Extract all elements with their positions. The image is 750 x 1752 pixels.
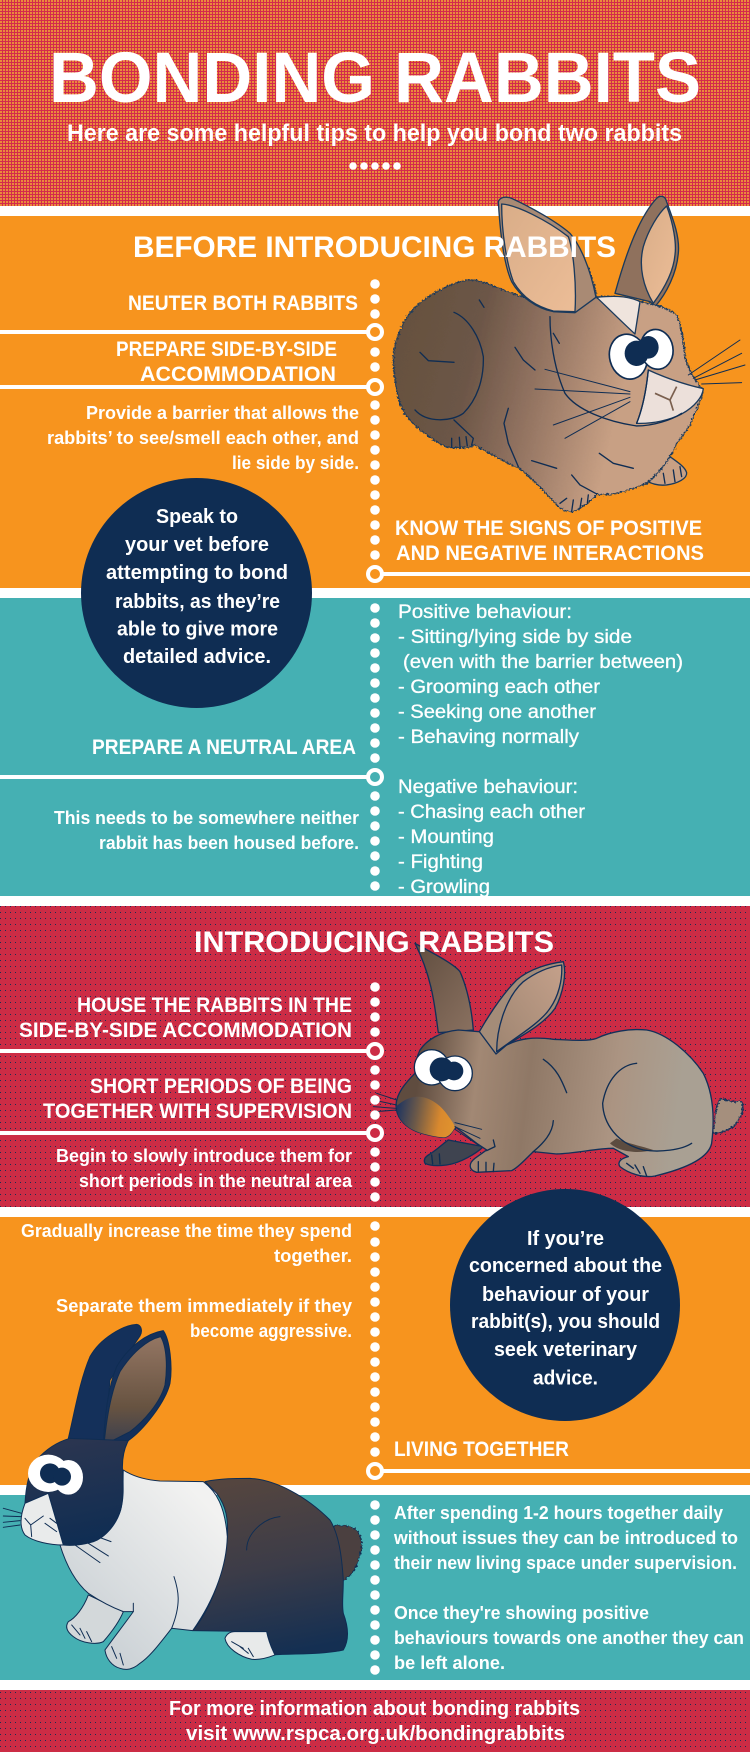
text: begin to slowly introduce: short periods in the neutral area — [79, 1171, 353, 1191]
step: prepare a neutral area: PREPARE A NEUTRAL AREA — [92, 735, 356, 759]
footer text — [169, 1698, 580, 1745]
list: positive behaviour: (even with the barrier between) — [403, 652, 683, 673]
list: positive behaviour: - Sitting/lying side by side — [398, 627, 632, 648]
step: short periods together: TOGETHER WITH SUPERVISION — [43, 1099, 352, 1123]
timeline rings — [368, 325, 382, 1478]
text: after spending 1-2 hours: After spending 1-2 hours together daily — [394, 1503, 723, 1523]
text: provide a barrier: rabbits’ to see/smell each other, and — [47, 428, 359, 448]
panel: introducing rabbits, red — [0, 906, 750, 1207]
callout circle: concerned about behaviour: If you’re — [527, 1228, 604, 1250]
text: somewhere neither rabbit has been housed: This needs to be somewhere neither — [54, 808, 359, 828]
text: once they're showing positive behaviours — [394, 1603, 744, 1673]
text: begin to slowly introduce — [56, 1146, 353, 1191]
callout circle: concerned about behaviour: concerned about the — [469, 1255, 662, 1277]
text: provide a barrier: lie side by side. — [232, 453, 359, 473]
callout circle: concerned about behaviour: seek veterinary — [494, 1339, 638, 1361]
step: know the signs: AND NEGATIVE INTERACTIONS — [396, 541, 704, 565]
subtitle: Here are some helpful tips to help you bond two rabbits — [67, 120, 682, 147]
text: separate them if aggressive: Separate them immediately if they — [56, 1296, 352, 1316]
list: positive behaviour: - Grooming each other — [398, 677, 601, 698]
list: negative behaviour: - Mounting — [398, 827, 494, 848]
callout circle: concerned about behaviour: behaviour of your — [482, 1284, 649, 1306]
list: positive behaviour: Positive behaviour: — [398, 602, 572, 623]
step: house the rabbits: SIDE-BY-SIDE ACCOMMODATION — [19, 1018, 352, 1042]
text: somewhere neither rabbit has been housed: rabbit has been housed before. — [99, 833, 359, 853]
text: after spending 1-2 hours: without issues they can be introduced to — [393, 1528, 738, 1548]
text: after spending 1-2 hours — [393, 1503, 738, 1573]
step: know the signs: KNOW THE SIGNS OF POSITIVE — [395, 516, 702, 540]
step: short periods together: SHORT PERIODS OF BEING — [90, 1074, 352, 1098]
panel: before introducing, orange — [0, 216, 750, 588]
dotted timeline — [370, 279, 380, 1675]
title: BONDING RABBITS — [49, 39, 701, 118]
step: house the rabbits — [19, 993, 352, 1042]
step: prepare side-by-side accommodation: ACCOMMODATION — [140, 362, 336, 386]
step: living together: LIVING TOGETHER — [394, 1437, 569, 1461]
heading: introducing rabbits: INTRODUCING RABBITS — [194, 926, 554, 959]
list: negative behaviour: Negative behaviour: — [398, 777, 578, 798]
panel: behaviours, teal — [0, 598, 750, 896]
panel: header background — [0, 0, 750, 206]
step: prepare side-by-side accommodation: PREPARE SIDE-BY-SIDE — [116, 337, 337, 361]
callout circle: speak to your vet: rabbits, as they’re — [115, 591, 280, 613]
step: prepare side-by-side accommodation — [116, 337, 337, 386]
text: provide a barrier: Provide a barrier that allows the — [86, 403, 359, 423]
step: neuter both rabbits: NEUTER BOTH RABBITS — [128, 291, 358, 315]
callout circle: speak to your vet: detailed advice. — [123, 646, 271, 668]
panel: footer background — [0, 1690, 750, 1752]
text: begin to slowly introduce: Begin to slowly introduce them for — [56, 1146, 352, 1166]
footer text: visit www.rspca.org.uk/bondingrabbits — [186, 1723, 565, 1745]
text: separate them if aggressive: become aggressive. — [190, 1321, 352, 1341]
text: gradually increase the time: Gradually increase the time they spend — [21, 1221, 352, 1241]
list: negative behaviour: - Growling — [398, 877, 490, 898]
illustration: dutch rabbit facing left — [3, 1324, 362, 1669]
list: negative behaviour — [398, 777, 586, 898]
list: negative behaviour: - Fighting — [398, 852, 483, 873]
text: once they're showing positive behaviours: behaviours towards one another they can — [394, 1628, 744, 1648]
list: negative behaviour: - Chasing each other — [398, 802, 586, 823]
text: once they're showing positive behaviours: be left alone. — [394, 1653, 505, 1673]
panel: gradually increase, orange — [0, 1217, 750, 1485]
callout circle: speak to your vet: able to give more — [117, 618, 278, 640]
list: positive behaviour: - Behaving normally — [398, 727, 580, 748]
step: house the rabbits: HOUSE THE RABBITS IN THE — [77, 993, 352, 1017]
text: once they're showing positive behaviours: Once they're showing positive — [394, 1603, 649, 1623]
list: positive behaviour — [398, 602, 683, 748]
footer text: For more information about bonding rabbits — [169, 1698, 580, 1720]
text: somewhere neither rabbit has been housed — [54, 808, 359, 853]
callout circle: concerned about behaviour: rabbit(s), you should — [471, 1311, 660, 1333]
callout circle: concerned about behaviour: advice. — [533, 1368, 598, 1390]
callout circle: speak to your vet: your vet before — [125, 534, 269, 556]
panel: living together, teal — [0, 1495, 750, 1680]
text: provide a barrier — [47, 403, 359, 473]
step: know the signs — [395, 516, 704, 565]
illustration: brown rabbit facing right — [393, 196, 745, 512]
callout circle: speak to your vet — [81, 478, 312, 708]
step: short periods together — [43, 1074, 352, 1123]
heading: before introducing rabbits: BEFORE INTRODUCING RABBITS — [133, 231, 616, 264]
horizontal connector lines — [0, 330, 750, 1473]
text: gradually increase the time: together. — [274, 1246, 352, 1266]
list: positive behaviour: - Seeking one another — [398, 702, 597, 723]
callout circle: speak to your vet: Speak to — [156, 506, 238, 528]
text: after spending 1-2 hours: their new living space under supervision. — [394, 1553, 737, 1573]
callout circle: speak to your vet: attempting to bond — [106, 562, 288, 584]
text: gradually increase the time — [21, 1221, 352, 1266]
illustration: grey-brown rabbit facing left — [373, 943, 743, 1177]
callout circle: concerned about behaviour — [450, 1189, 680, 1421]
five decorative dots under subtitle — [349, 162, 401, 170]
text: separate them if aggressive — [56, 1296, 352, 1341]
